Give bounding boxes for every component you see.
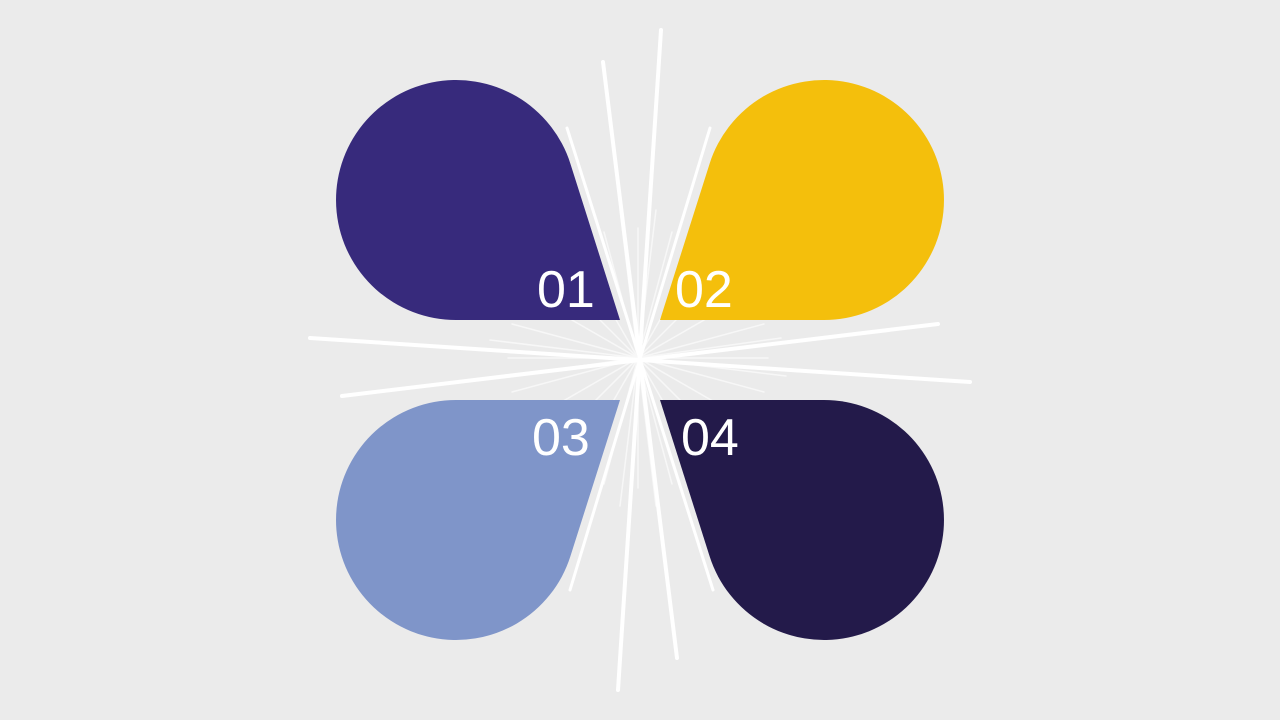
petal 01	[336, 80, 620, 320]
petal 03	[336, 400, 620, 640]
label 04: 04	[681, 409, 739, 467]
label 01: 01	[537, 261, 595, 319]
rays burst	[310, 30, 970, 690]
petal 02	[660, 80, 944, 320]
petal 04	[660, 400, 944, 640]
label 03: 03	[532, 409, 590, 467]
label 02: 02	[675, 261, 733, 319]
